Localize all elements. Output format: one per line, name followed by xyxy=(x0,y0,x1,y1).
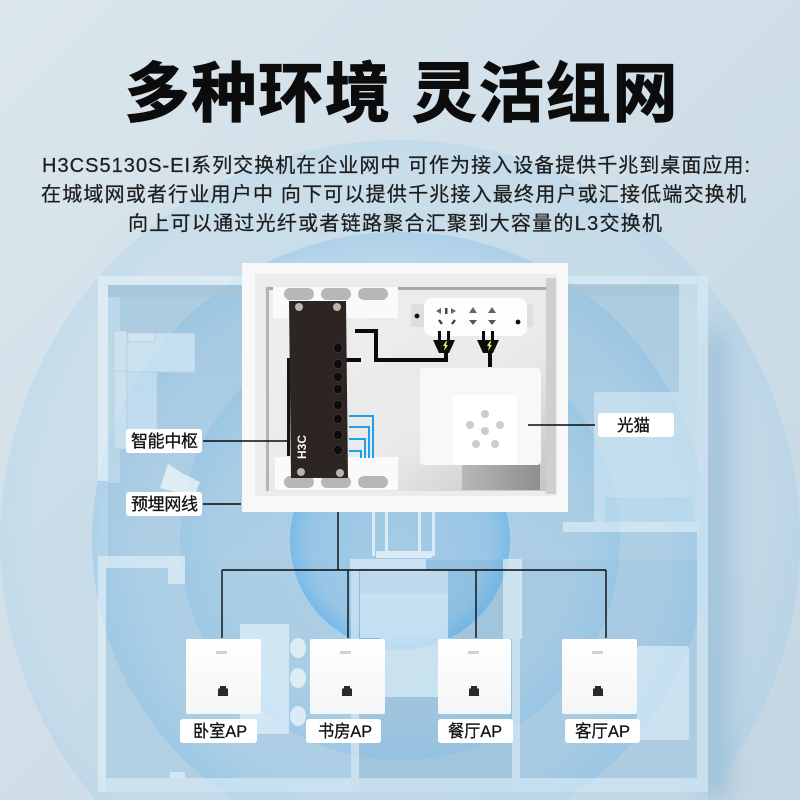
bottom bracket xyxy=(275,457,398,490)
label: 卧室AP: 卧室AP xyxy=(193,722,247,741)
label: 餐厅AP: 餐厅AP xyxy=(448,722,502,741)
switch logo: H3C xyxy=(295,435,309,459)
label: 卧室AP xyxy=(180,719,257,743)
label: 客厅AP: 客厅AP xyxy=(575,722,630,741)
cabinet frame xyxy=(242,263,568,512)
title: 多种环境 灵活组网 xyxy=(124,57,678,130)
upper right room walls xyxy=(568,276,708,792)
armchair xyxy=(160,464,200,497)
room floors xyxy=(106,285,698,792)
label: 智能中枢: 智能中枢 xyxy=(131,432,198,451)
black power cables xyxy=(346,331,490,367)
top bracket xyxy=(273,287,398,318)
description text: 向上可以通过光纤或者链路聚合汇聚到大容量的L3交换机 xyxy=(128,212,662,235)
switch body xyxy=(287,301,348,478)
AP: dining room xyxy=(438,639,511,714)
TV cabinet and shelf xyxy=(563,392,699,532)
upper left room walls xyxy=(98,276,244,483)
label: 智能中枢 xyxy=(126,429,202,453)
connection lines xyxy=(203,425,606,638)
label: 预埋网线 xyxy=(126,492,202,516)
lower right room walls xyxy=(98,778,708,800)
label: 客厅AP xyxy=(565,719,640,743)
power socket strip xyxy=(411,298,533,336)
description text: H3CS5130S-EI系列交换机在企业网中 可作为接入设备提供千兆到桌面应用: xyxy=(42,154,750,177)
AP: study xyxy=(310,639,385,714)
blue network cables xyxy=(349,416,373,458)
wiring cabinet xyxy=(242,263,568,512)
label: 书房AP xyxy=(306,719,381,743)
label: 预埋网线: 预埋网线 xyxy=(131,495,198,514)
label: 书房AP: 书房AP xyxy=(318,722,372,741)
label: 餐厅AP xyxy=(438,719,513,743)
description text: 在城域网或者行业用户中 向下可以提供千兆接入最终用户或汇接低端交换机 xyxy=(41,183,746,206)
description text xyxy=(41,154,750,235)
lower middle room walls xyxy=(351,560,520,792)
living room side cabinet xyxy=(637,646,689,740)
cabinet interior xyxy=(266,287,546,491)
label: 光猫: 光猫 xyxy=(617,416,650,435)
shadow beside the floor plan xyxy=(700,330,726,800)
walls and furniture of the home xyxy=(98,276,708,800)
power plugs xyxy=(433,331,499,353)
AP: bedroom xyxy=(186,639,261,714)
lower left room walls xyxy=(98,556,352,792)
sofa xyxy=(114,331,195,449)
optical modem xyxy=(420,368,541,490)
bed and stand in central room xyxy=(350,512,522,697)
label: 光猫 xyxy=(598,413,674,437)
AP: living room xyxy=(562,639,637,714)
bedroom wardrobe and round stools xyxy=(240,624,306,734)
